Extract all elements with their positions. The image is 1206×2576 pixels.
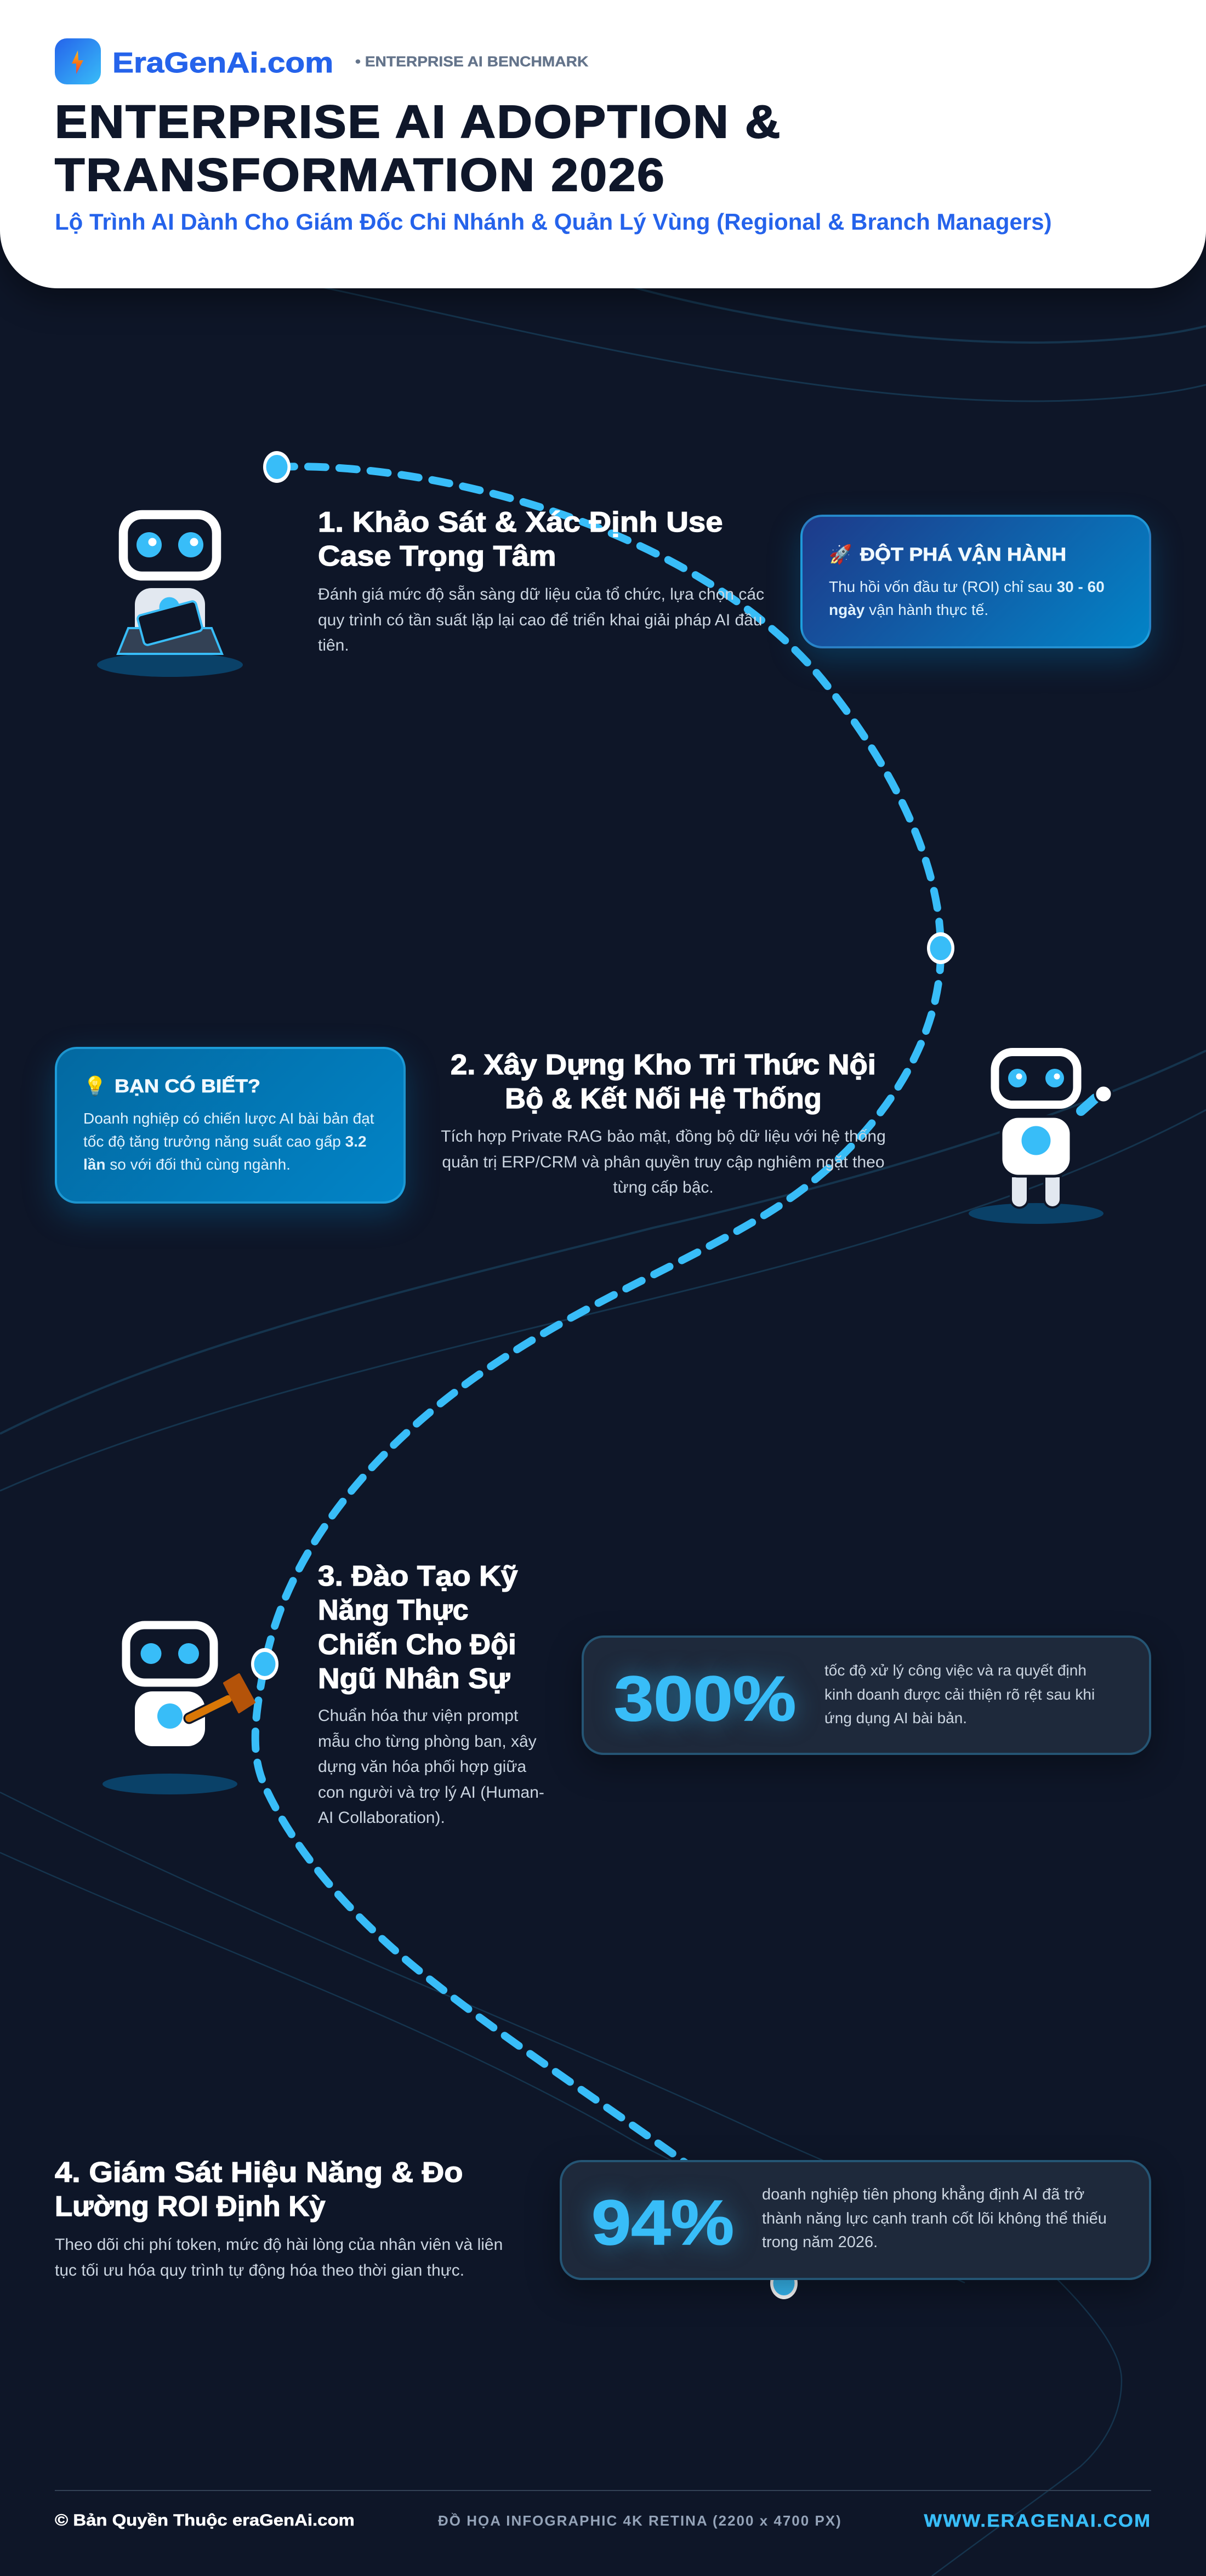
stat text: doanh nghiệp tiên phong khẳng định AI đã trở [762, 2186, 1084, 2203]
step 4 description: Theo dõi chi phí token, mức độ hài lòng của nhân viên và liên [55, 2236, 503, 2254]
step 1 heading [318, 506, 723, 572]
step 2 [441, 1049, 886, 1196]
stat text: ứng dụng AI bài bản. [824, 1709, 967, 1726]
callout body: Thu hồi vốn đầu tư (ROI) chỉ sau 30 - 60 [829, 578, 1105, 595]
subtitle: Lộ Trình AI Dành Cho Giám Đốc Chi Nhánh & Quản Lý Vùng (Regional & Branch Managers) [55, 209, 1052, 235]
step 3 description: dựng văn hóa phối hợp giữa [318, 1758, 526, 1776]
stat text: tốc độ xử lý công việc và ra quyết định [824, 1662, 1086, 1679]
step 3 heading: Chiến Cho Đội [318, 1629, 516, 1661]
step 3 description: AI Collaboration). [318, 1809, 445, 1827]
website: WWW.ERAGENAI.COM [924, 2511, 1151, 2531]
footer [55, 2490, 1151, 2540]
callout icon: 🚀 [829, 544, 852, 565]
robot 1: laptop [97, 515, 243, 677]
step 3 heading: 3. Đào Tạo Kỹ [318, 1560, 518, 1592]
callout title: BẠN CÓ BIẾT? [115, 1076, 260, 1097]
step 3 heading [318, 1560, 519, 1695]
step 2 heading: 2. Xây Dựng Kho Tri Thức Nội [451, 1049, 876, 1081]
logo wordmark: EraGenAi.com [112, 47, 333, 79]
stat number: 300% [614, 1663, 796, 1734]
stat text [762, 2183, 1107, 2255]
callout icon: 💡 [83, 1076, 106, 1097]
callout body: lần so với đối thủ cùng ngành. [83, 1156, 291, 1173]
stat card: 300% [582, 1635, 1151, 1755]
step 3 description: mẫu cho từng phòng ban, xây [318, 1732, 537, 1751]
step 4 [55, 2156, 526, 2287]
step 1 description [318, 585, 764, 654]
callout body [83, 1110, 374, 1173]
step 3 heading: Năng Thực [318, 1594, 469, 1626]
step 2 description: quản trị ERP/CRM và phân quyền truy cập nghiêm ngặt theo [442, 1153, 885, 1171]
copyright: © Bản Quyền Thuộc eraGenAi.com [55, 2511, 355, 2529]
title: ENTERPRISE AI ADOPTION & [55, 96, 782, 147]
step 3 description [318, 1707, 544, 1827]
node 4 [770, 2267, 798, 2299]
step 1 description: quy trình có tần suất lặp lại cao để triển khai giải pháp AI đầu [318, 611, 763, 629]
step 4 description [55, 2232, 503, 2283]
benchmark tag: • ENTERPRISE AI BENCHMARK [355, 53, 588, 70]
step 4 heading: Lường ROI Định Kỳ [55, 2191, 326, 2222]
callout body: Doanh nghiệp có chiến lược AI bài bản đạt [83, 1110, 374, 1127]
callout body [829, 578, 1105, 618]
step 3 heading: Ngũ Nhân Sự [318, 1663, 510, 1695]
callout title: ĐỘT PHÁ VẬN HÀNH [860, 544, 1066, 565]
stat text: thành năng lực cạnh tranh cốt lõi không thể thiếu [762, 2210, 1107, 2227]
title [55, 96, 782, 201]
step 1 heading: 1. Khảo Sát & Xác Định Use [318, 506, 723, 538]
step 1 heading: Case Trọng Tâm [318, 540, 556, 572]
step 1 [318, 506, 764, 654]
step 2 heading: Bộ & Kết Nối Hệ Thống [505, 1083, 822, 1115]
stat text: kinh doanh được cải thiện rõ rệt sau khi [824, 1686, 1095, 1702]
callout: operational breakthrough [800, 515, 1151, 648]
title: TRANSFORMATION 2026 [55, 149, 665, 201]
header panel [0, 0, 1206, 288]
step 3 [318, 1560, 544, 1827]
callout body: tốc độ tăng trưởng năng suất cao gấp 3.2 [83, 1133, 367, 1150]
step 4 heading: 4. Giám Sát Hiệu Năng & Đo [55, 2157, 463, 2189]
step 3 description: con người và trợ lý AI (Human- [318, 1783, 544, 1801]
node 1 [263, 451, 291, 483]
robot 2: waving [969, 1052, 1112, 1224]
logo icon [55, 38, 101, 84]
step 1 description: tiên. [318, 636, 349, 654]
format note: ĐỒ HỌA INFOGRAPHIC 4K RETINA (2200 x 4700 PX) [438, 2512, 842, 2529]
step 2 description [441, 1127, 886, 1196]
stat card: 94% [560, 2160, 1151, 2280]
stat text: trong năm 2026. [762, 2233, 878, 2251]
callout: did you know [55, 1047, 406, 1204]
callout body: ngày vận hành thực tế. [829, 601, 988, 618]
step 1 description: Đánh giá mức độ sẵn sàng dữ liệu của tổ chức, lựa chọn các [318, 585, 764, 603]
step 2 description: từng cấp bậc. [613, 1178, 714, 1196]
robot 3: hammer [103, 1625, 254, 1794]
step 2 heading [451, 1049, 876, 1115]
node 2 [927, 932, 954, 964]
step 4 description: tục tối ưu hóa quy trình tự động hóa theo thời gian thực. [55, 2261, 464, 2279]
step 2 description: Tích hợp Private RAG bảo mật, đồng bộ dữ liệu với hệ thống [441, 1127, 886, 1145]
stat text [824, 1659, 1095, 1730]
step 3 description: Chuẩn hóa thư viện prompt [318, 1707, 518, 1725]
roadmap dashed path [255, 466, 941, 2283]
stat number: 94% [591, 2187, 734, 2258]
node 3 [251, 1648, 278, 1680]
step 4 heading [55, 2156, 434, 2224]
